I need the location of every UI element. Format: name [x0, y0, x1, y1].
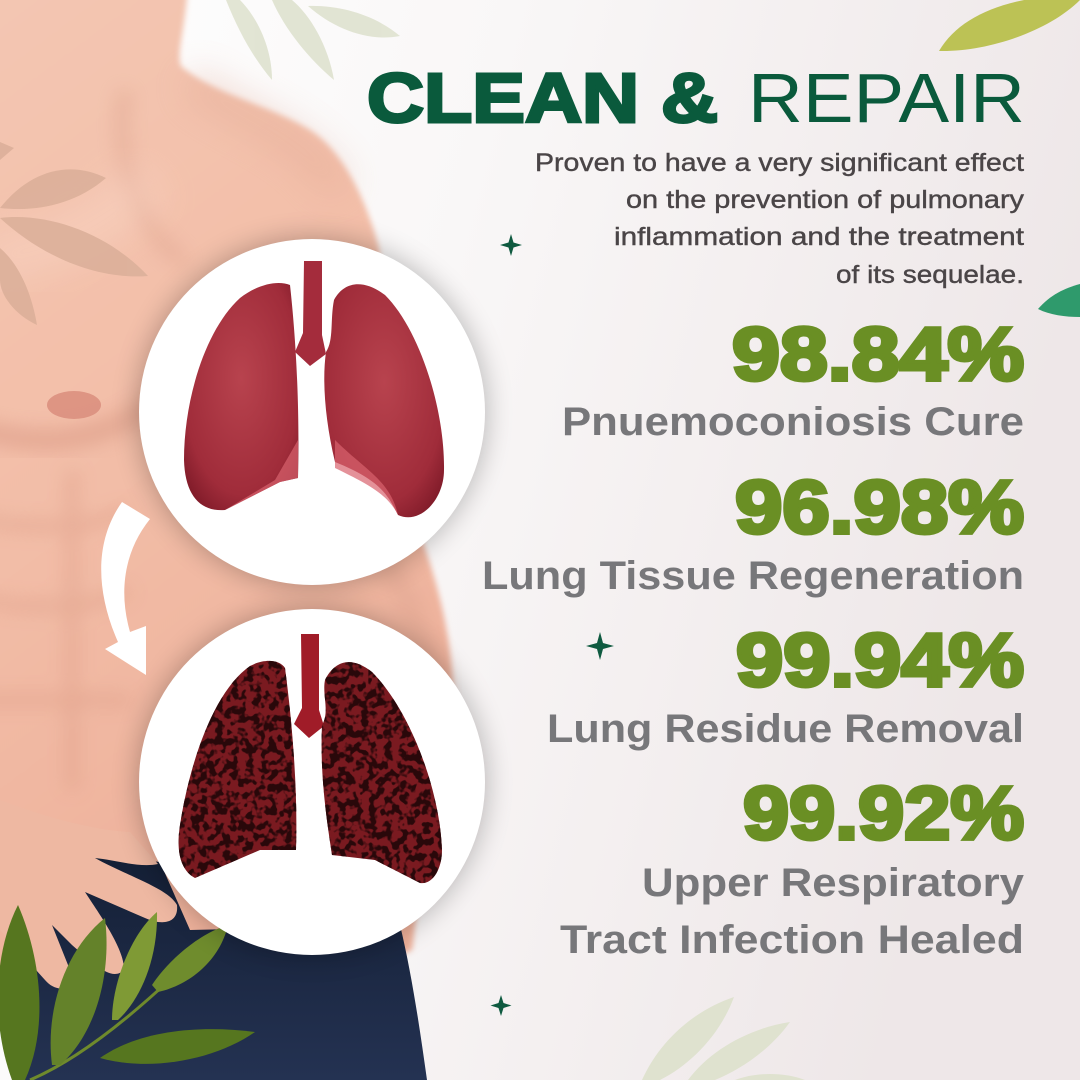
bottom right leaves	[642, 997, 805, 1080]
title	[367, 59, 1025, 137]
right leaf	[1038, 284, 1080, 317]
circle: damaged lungs	[139, 609, 485, 955]
hand	[0, 800, 177, 988]
top right leaf	[939, 0, 1080, 51]
stat 4: Tract Infection Healed	[560, 918, 1024, 962]
description: inflammation and the treatment	[614, 223, 1024, 251]
stat 1: 98.84%	[732, 312, 1024, 396]
title: CLEAN &	[367, 59, 718, 137]
sparkles	[490, 234, 614, 1016]
stat 4: Upper Respiratory	[642, 861, 1025, 905]
stat 2: 96.98%	[735, 465, 1024, 549]
description: of its sequelae.	[836, 261, 1024, 289]
shorts	[20, 852, 427, 1080]
arrow	[101, 502, 150, 675]
left leaves	[0, 142, 148, 325]
bottom left plant	[0, 905, 255, 1080]
description: on the prevention of pulmonary	[626, 186, 1025, 214]
top leaves	[226, 0, 400, 80]
description	[535, 149, 1025, 289]
stat 1	[562, 312, 1024, 444]
damaged lungs illustration	[170, 634, 450, 890]
stat 3: Lung Residue Removal	[547, 707, 1024, 751]
stat 3	[547, 618, 1024, 751]
stat 2	[482, 465, 1024, 598]
model torso	[0, 0, 453, 1080]
description: Proven to have a very significant effect	[535, 149, 1024, 177]
stat 1: Pnuemoconiosis Cure	[562, 400, 1024, 444]
healthy lungs illustration	[184, 261, 444, 517]
circle: healthy lungs	[139, 239, 485, 585]
stat 2: Lung Tissue Regeneration	[482, 554, 1024, 598]
stat 3: 99.94%	[736, 618, 1024, 702]
nipple	[47, 391, 101, 419]
stat 4: 99.92%	[743, 771, 1024, 855]
title: REPAIR	[748, 59, 1025, 137]
stat 4	[560, 771, 1025, 962]
